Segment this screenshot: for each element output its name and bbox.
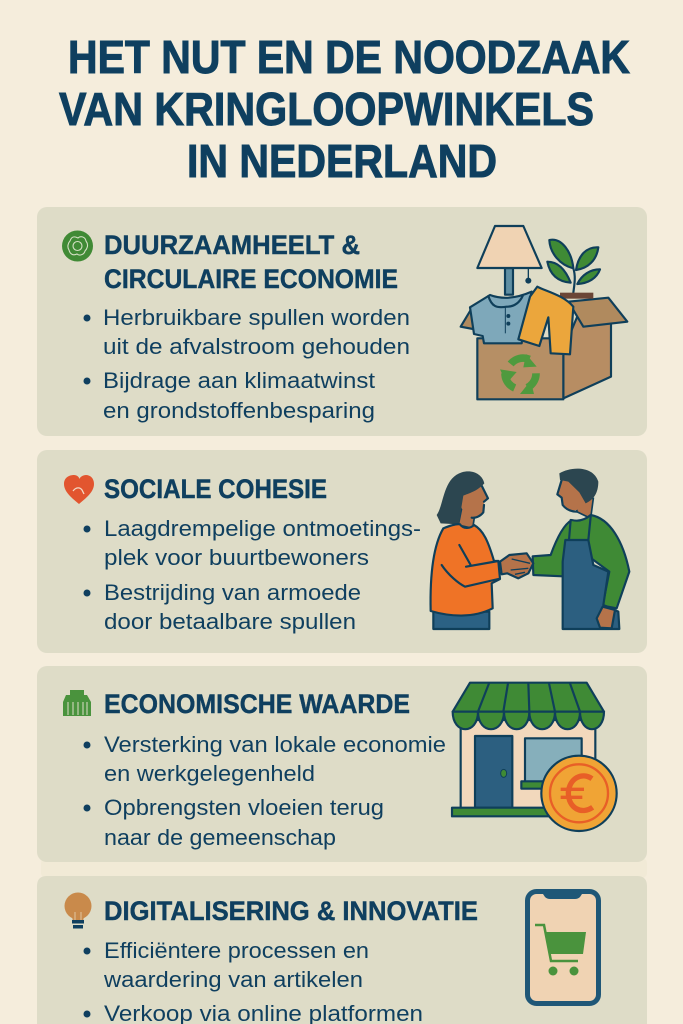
illustration: phone with cart: [528, 891, 598, 1004]
panel: digitalisering: [37, 876, 647, 1024]
bullet list: plek voor buurtbewoners: [104, 545, 369, 570]
panel: duurzaamheid: [37, 207, 647, 436]
bullet list: Laagdrempelige ontmoetings-: [104, 516, 421, 541]
euro coin: [541, 756, 617, 831]
icon: heart: [64, 475, 94, 504]
heading: DUURZAAMHEELT &: [104, 230, 360, 260]
bullet list: door betaalbare spullen: [104, 609, 356, 634]
bullet list: waardering van artikelen: [103, 967, 363, 992]
icon: recycling symbol: [500, 354, 537, 394]
bullet list: en werkgelegenheld: [104, 761, 315, 786]
bullet list: [84, 732, 446, 850]
bullet list: [84, 305, 410, 423]
bullet list: [84, 938, 423, 1024]
panel: light strip: [41, 858, 647, 878]
title: HET NUT EN DE NOODZAAK: [68, 31, 630, 83]
title: IN NEDERLAND: [187, 135, 497, 187]
panel: sociale cohesie: [37, 450, 647, 653]
bullet list: Herbruikbare spullen worden: [103, 305, 410, 330]
title: [59, 31, 630, 187]
heading: ECONOMISCHE WAARDE: [104, 689, 410, 719]
bullet list: [84, 516, 421, 634]
hands: [500, 553, 533, 578]
illustration: shop with euro coin: [452, 683, 617, 831]
bullet list: Opbrengsten vloeien terug: [104, 795, 384, 820]
bullet list: Efficiëntere processen en: [104, 938, 369, 963]
bullet list: Versterking van lokale economie: [104, 732, 446, 757]
illustration: handshake: [431, 469, 629, 629]
bullet list: uit de afvalstroom gehouden: [103, 334, 410, 359]
woman: [431, 471, 500, 629]
heading: SOCIALE COHESIE: [104, 474, 327, 504]
bullet list: en grondstoffenbesparing: [103, 398, 375, 423]
bullet list: Bijdrage aan klimaatwinst: [103, 368, 376, 393]
icon: market: [63, 690, 91, 716]
heading: CIRCULAIRE ECONOMIE: [104, 264, 398, 294]
bullet list: Bestrijding van armoede: [104, 580, 361, 605]
man: [533, 469, 629, 629]
panel: economische waarde: [37, 666, 647, 862]
heading: [104, 230, 398, 294]
icon: light bulb: [64, 892, 92, 928]
title: VAN KRINGLOOPWINKELS: [59, 83, 594, 135]
illustration: box with second-hand goods: [461, 226, 627, 399]
cart: [535, 925, 586, 976]
heading: DIGITALISERING & INNOVATIE: [104, 896, 478, 926]
icon: green circle: [62, 230, 93, 262]
bullet list: naar de gemeenschap: [104, 825, 336, 850]
